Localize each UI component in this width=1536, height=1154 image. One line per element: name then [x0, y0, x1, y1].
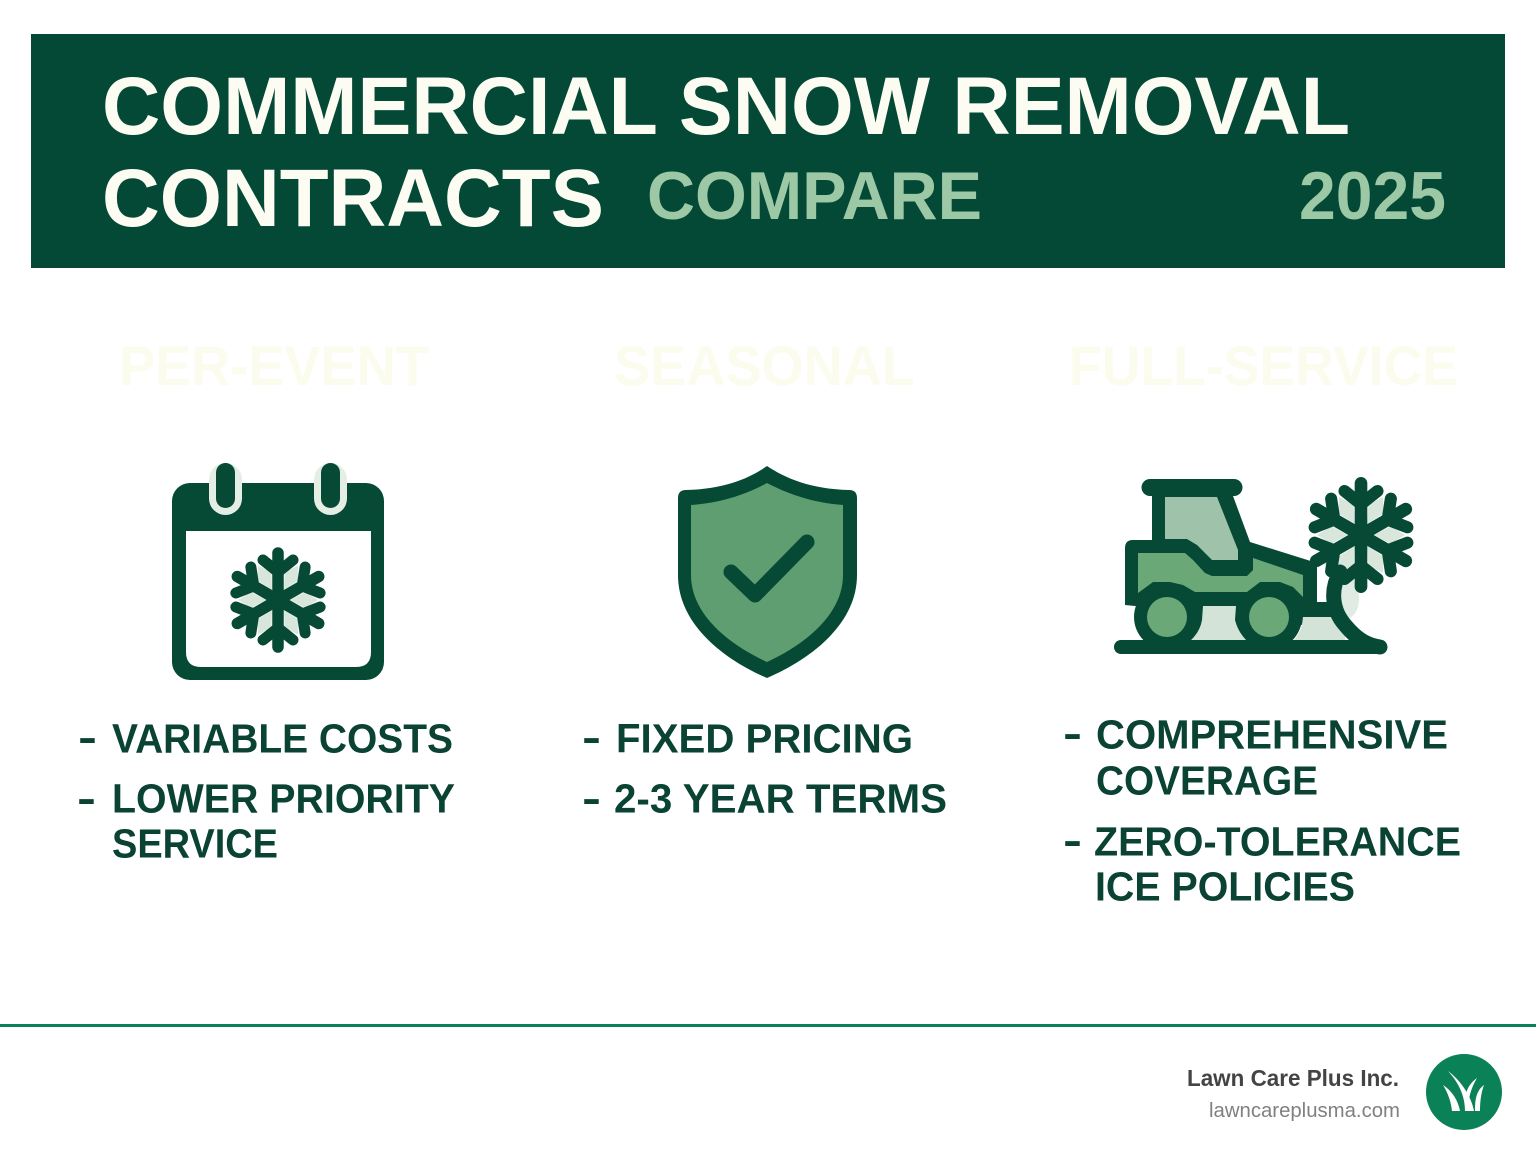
icon: calendar with snowflake — [172, 463, 384, 680]
icon: shield with check — [678, 466, 857, 678]
icon: grass logo — [1426, 1054, 1502, 1130]
title — [102, 61, 1350, 244]
list: full-service points — [1063, 710, 1461, 910]
footer brand name: Lawn Care Plus Inc. — [1187, 1065, 1399, 1091]
icon: snow plow with snowflake — [1121, 483, 1414, 650]
list: per-event points: - — [77, 775, 96, 821]
list: per-event points: - — [78, 714, 97, 760]
list: seasonal points: 2-3 YEAR TERMS — [614, 776, 947, 822]
footer website: lawncareplusma.com — [1209, 1100, 1400, 1122]
list: seasonal points: - — [582, 775, 601, 821]
banner — [31, 34, 1505, 268]
list: per-event points: VARIABLE COSTS — [112, 716, 453, 762]
list: seasonal points — [582, 714, 947, 822]
list: seasonal points: FIXED PRICING — [616, 716, 913, 762]
list: per-event points: LOWER PRIORITY — [112, 776, 455, 822]
list: full-service points: COVERAGE — [1096, 758, 1318, 804]
subtitle: year: 2025 — [1299, 158, 1446, 234]
list: full-service points: - — [1063, 710, 1082, 756]
subtitle: compare: COMPARE — [647, 158, 982, 234]
column heading: seasonal: SEASONAL — [614, 334, 915, 397]
list: full-service points: COMPREHENSIVE — [1096, 712, 1448, 758]
column heading: full-service: FULL-SERVICE — [1069, 334, 1458, 397]
list: full-service points: ICE POLICIES — [1095, 864, 1355, 910]
list: per-event points: SERVICE — [112, 820, 278, 866]
title: CONTRACTS — [102, 153, 604, 244]
list: per-event points — [77, 714, 455, 866]
list: full-service points: ZERO-TOLERANCE — [1094, 818, 1461, 864]
list: seasonal points: - — [582, 714, 601, 760]
title: COMMERCIAL SNOW REMOVAL — [102, 61, 1350, 152]
column heading: per-event: PER-EVENT — [119, 334, 429, 397]
list: full-service points: - — [1063, 817, 1082, 863]
